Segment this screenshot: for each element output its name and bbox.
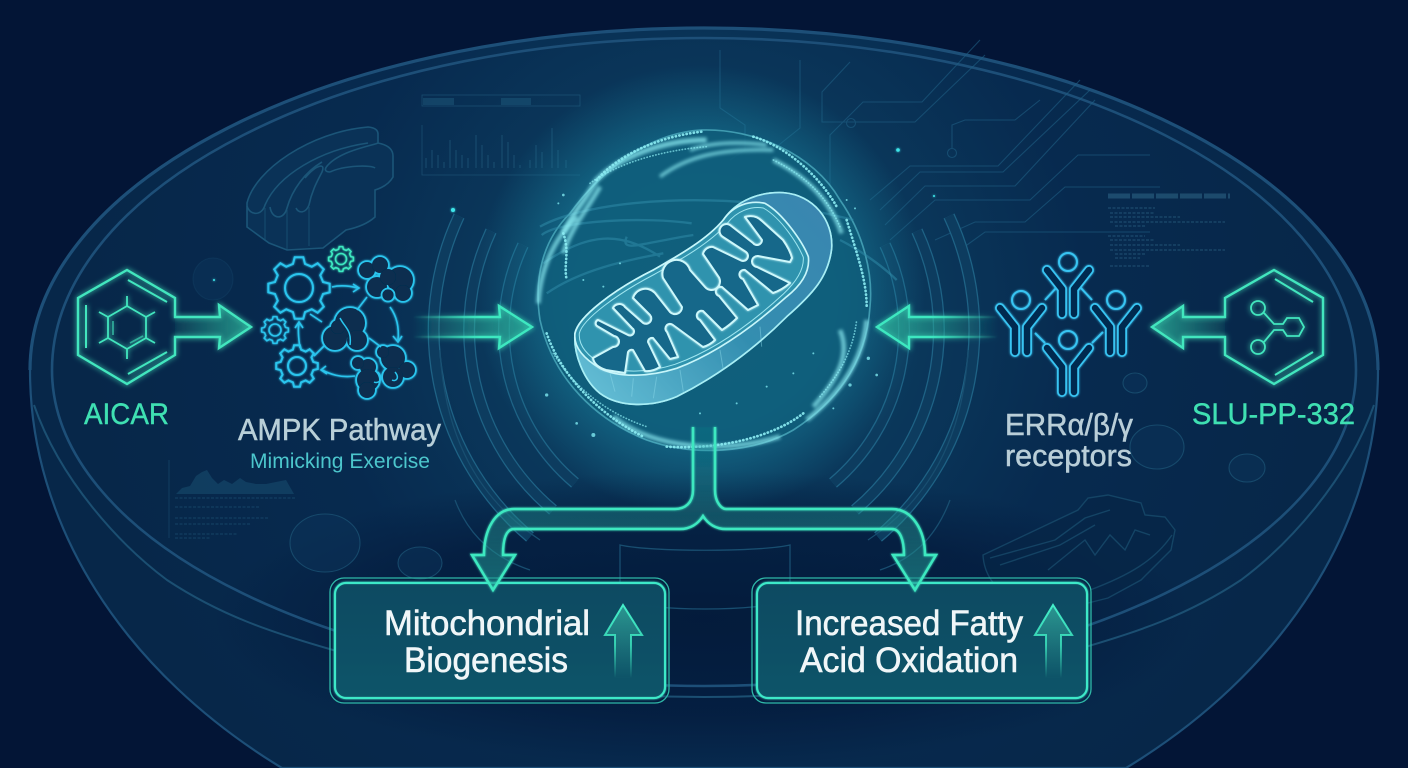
background chart: upper left xyxy=(422,95,580,175)
background chart: lower left xyxy=(169,460,295,538)
icon: green gear xyxy=(329,247,353,271)
heading: Mitochondrial Biogenesis xyxy=(384,604,590,680)
heading: Increased Fatty Acid Oxidation xyxy=(795,604,1023,680)
panel: Mitochondrial Biogenesis xyxy=(330,578,669,703)
sphere glow xyxy=(475,65,925,515)
background circuit traces xyxy=(720,40,1160,250)
mitochondrion rim xyxy=(575,202,809,375)
label: AMPK Pathway: AMPK Pathway xyxy=(238,412,441,447)
mitochondrion outer body xyxy=(575,193,832,404)
sphere shell xyxy=(538,130,871,450)
nuclear and endoplasmic rings around the mitochondrion xyxy=(434,216,974,609)
small vesicles xyxy=(193,258,1265,579)
background code text block xyxy=(1108,196,1230,266)
icon: small left gear xyxy=(262,317,288,343)
icon: protein clusters xyxy=(323,257,415,398)
icon: lower gear xyxy=(276,345,318,387)
sphere wisps xyxy=(538,132,867,447)
icon: AMPK pathway network xyxy=(262,247,415,398)
glow dots xyxy=(213,148,935,281)
floating particles xyxy=(545,194,878,437)
inner rings seen through sphere xyxy=(540,200,897,293)
icon: inner benzene ring xyxy=(99,296,155,359)
label: ERR receptors xyxy=(1005,407,1133,473)
folds under rim xyxy=(610,327,762,398)
icon: up arrow xyxy=(605,605,642,678)
arrow: SLU-PP-332 hexagon with arrow xyxy=(1152,270,1323,384)
icon: molecule xyxy=(1251,301,1304,354)
label line: receptors: receptors xyxy=(1005,438,1132,473)
small organelle: lower right mitochondrion xyxy=(983,495,1175,610)
icon: up arrow xyxy=(1035,605,1072,678)
cristae inner membrane xyxy=(593,216,792,373)
icon: large gear xyxy=(268,257,330,319)
icon: ERR receptors xyxy=(1000,253,1137,392)
rim second line xyxy=(579,208,803,371)
receptor: right xyxy=(1095,291,1137,352)
heading: Increased Fatty Acid Oxidation: Acid Oxidation xyxy=(800,641,1018,680)
icon: pathway arrows xyxy=(295,284,402,377)
arrow: AMPK to mitochondrion xyxy=(413,306,532,348)
label: AMPK Pathway xyxy=(238,412,441,473)
golgi stack organelle xyxy=(247,127,393,250)
receptor: bottom xyxy=(1047,331,1089,392)
receptor: left xyxy=(1000,291,1042,352)
receptor: top xyxy=(1047,253,1089,314)
panel: Increased Fatty Acid Oxidation xyxy=(752,578,1091,703)
arrow: split to two outcomes xyxy=(472,427,936,590)
sublabel: Mimicking Exercise: Mimicking Exercise xyxy=(250,450,430,473)
heading: Mitochondrial Biogenesis: Mitochondrial xyxy=(384,604,590,643)
heading: Mitochondrial Biogenesis: Biogenesis xyxy=(404,641,568,680)
label: AICAR: AICAR xyxy=(84,398,169,431)
heading: Increased Fatty Acid Oxidation: Increased Fatty xyxy=(795,604,1023,643)
arrow: AICAR hexagon with arrow xyxy=(78,270,251,384)
arrow: receptors to mitochondrion xyxy=(877,306,998,348)
central sphere and mitochondrion xyxy=(475,65,925,515)
label: SLU-PP-332: SLU-PP-332 xyxy=(1192,398,1355,431)
label: ERR receptors: ERRα/β/γ xyxy=(1005,407,1133,442)
